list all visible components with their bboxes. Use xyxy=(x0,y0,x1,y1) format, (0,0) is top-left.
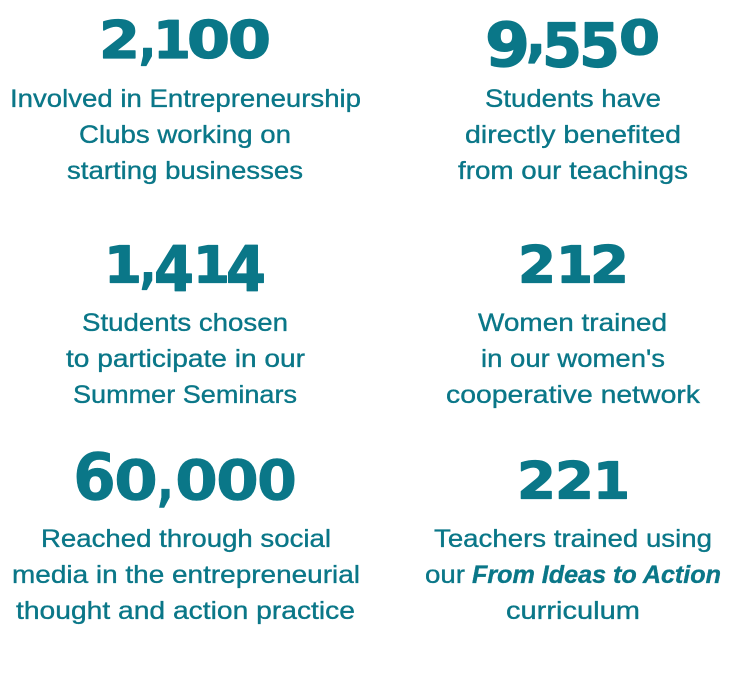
number: 2,100: 0 xyxy=(228,11,271,71)
description: entrepreneurship clubs: starting businesses xyxy=(67,157,303,185)
number: 9,550: 9 xyxy=(485,10,530,81)
number: 2,100: 0 xyxy=(187,11,230,71)
panel: students benefited stat xyxy=(458,4,688,185)
number: 2,100: 2 xyxy=(99,11,140,71)
number: 221: 2 xyxy=(517,452,556,512)
description: entrepreneurship clubs: Clubs working on xyxy=(79,121,291,149)
description: women trained: in our women's xyxy=(481,345,665,373)
description: teachers trained xyxy=(425,525,721,625)
number: 212: 1 xyxy=(556,236,593,296)
number: 1,414: 4 xyxy=(154,233,194,306)
description: social media reach xyxy=(12,525,360,625)
description: students benefited xyxy=(458,85,688,185)
number: 60,000: 0 xyxy=(257,448,297,512)
number: 212: 2 xyxy=(590,236,629,296)
number: 221 xyxy=(517,452,630,512)
description: summer seminars: Summer Seminars xyxy=(73,381,297,409)
description: social media reach: media in the entrepreneurial xyxy=(12,561,360,589)
panel: women trained stat xyxy=(446,236,701,409)
number: 1,414: 4 xyxy=(226,233,266,306)
description: summer seminars: Students chosen xyxy=(82,309,288,337)
number: 60,000: 6 xyxy=(73,440,116,516)
number: 60,000 xyxy=(73,440,297,516)
number: 60,000: , xyxy=(157,448,174,512)
number: 1,414: 1 xyxy=(193,236,230,296)
number: 9,550: 5 xyxy=(579,10,620,82)
description: entrepreneurship clubs: Involved in Entrepreneurship xyxy=(10,85,361,113)
number: 9,550 xyxy=(485,4,660,82)
number: 60,000: 0 xyxy=(175,448,218,512)
description: social media reach: thought and action practice xyxy=(16,597,355,625)
number: 2,100 xyxy=(99,11,271,71)
panel: summer seminars stat xyxy=(66,233,305,409)
description: social media reach: Reached through social xyxy=(41,525,331,553)
panel: teachers trained stat xyxy=(425,452,721,625)
panel: entrepreneurship clubs stat xyxy=(10,11,361,185)
description: summer seminars xyxy=(66,309,305,409)
number: 60,000: 0 xyxy=(216,448,259,512)
number: 2,100: 1 xyxy=(153,11,191,71)
number: 9,550: , xyxy=(526,4,546,69)
description: students benefited: directly benefited xyxy=(465,121,681,149)
panel: social media reach stat xyxy=(12,440,360,625)
description: entrepreneurship clubs xyxy=(10,85,361,185)
number: 1,414 xyxy=(104,233,266,306)
description: students benefited: from our teachings xyxy=(458,157,688,185)
description: teachers trained: Teachers trained using xyxy=(434,525,712,553)
number: 2,100: , xyxy=(139,11,156,71)
number: 212 xyxy=(518,236,629,296)
number: 9,550: 0 xyxy=(619,12,660,66)
description: teachers trained: our xyxy=(425,561,465,589)
number: 212: 2 xyxy=(518,236,556,296)
number: 1,414: , xyxy=(140,236,156,296)
description: women trained: Women trained xyxy=(478,309,667,337)
number: 1,414: 1 xyxy=(104,236,142,296)
number: 221: 2 xyxy=(555,452,594,512)
number: 60,000: 0 xyxy=(114,448,158,512)
description: women trained: cooperative network xyxy=(446,381,701,409)
number: 9,550: 5 xyxy=(542,10,582,82)
description: summer seminars: to participate in our xyxy=(66,345,305,373)
description: teachers trained: curriculum xyxy=(506,597,640,625)
number: 221: 1 xyxy=(593,452,630,512)
description: students benefited: Students have xyxy=(485,85,661,113)
description: women trained xyxy=(446,309,701,409)
description: teachers trained: From Ideas to Action xyxy=(472,561,721,589)
